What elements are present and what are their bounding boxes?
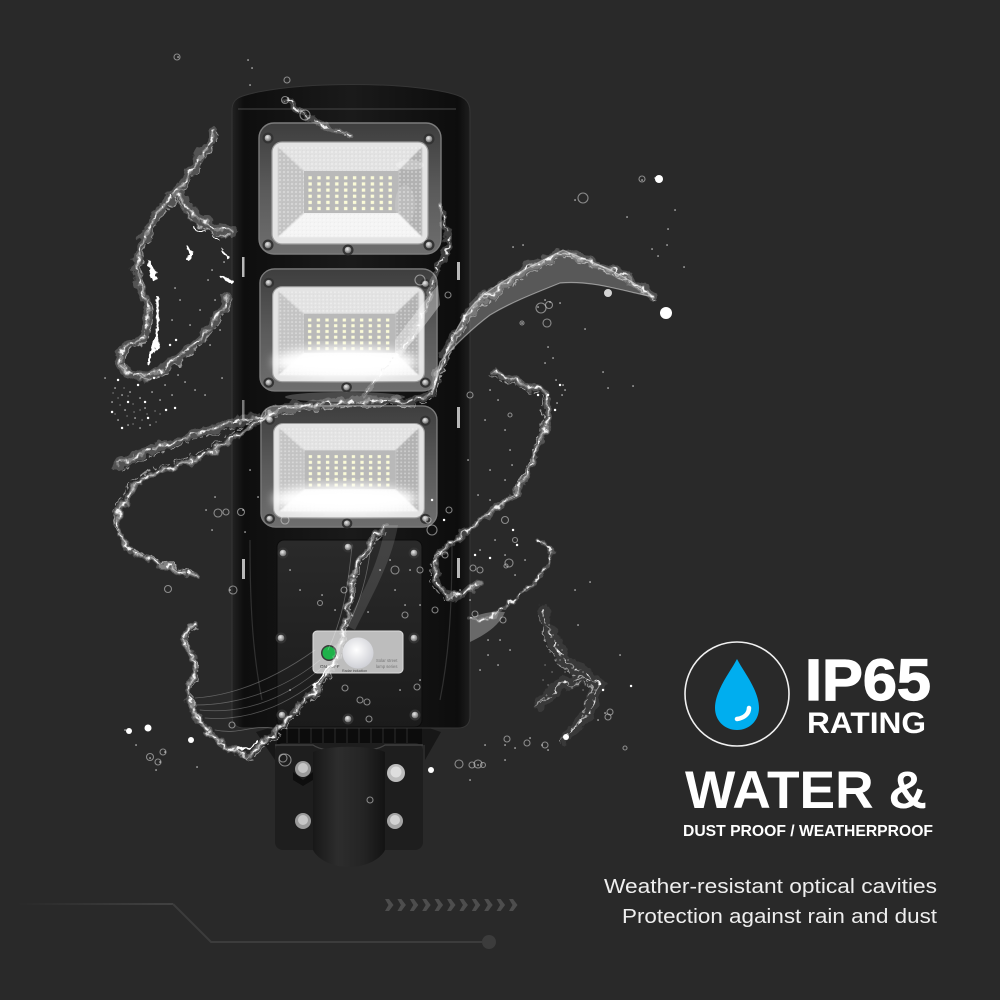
battery plate <box>276 540 422 727</box>
mounting bracket <box>256 726 441 867</box>
LED panel 1 <box>259 123 441 256</box>
sensor module: Radar induction <box>342 669 367 673</box>
icon: ring with water drop <box>685 642 789 746</box>
description text: Protection against rain and dust <box>622 906 937 928</box>
droplet rings <box>146 54 645 803</box>
LED panel 3 <box>261 406 437 528</box>
lamp body <box>232 84 470 728</box>
side slots <box>242 257 460 579</box>
sensor module: Solar street <box>376 658 398 663</box>
sensor module <box>313 631 403 673</box>
chevron row <box>385 899 518 911</box>
main stream blade <box>432 250 653 395</box>
decorative circuit line with node <box>17 904 496 949</box>
thin water sheet strands <box>195 525 505 731</box>
heading: water and: WATER & <box>685 761 927 820</box>
description text <box>604 876 937 928</box>
street lamp <box>232 84 470 867</box>
large drops <box>126 175 672 773</box>
bright highlights <box>147 228 335 752</box>
cluster dots <box>112 258 631 770</box>
subheading: dust proof: DUST PROOF / WEATHERPROOF <box>683 823 933 840</box>
bolts <box>293 761 405 829</box>
water splash <box>105 54 684 803</box>
water dust clouds <box>113 388 595 692</box>
description text: Weather-resistant optical cavities <box>604 876 937 898</box>
sensor module: lamp series <box>376 664 397 669</box>
droplet dots <box>105 57 684 780</box>
heading: rating: RATING <box>807 707 926 740</box>
LED panel 2 <box>260 269 437 392</box>
badge: IP65 rating <box>685 642 931 746</box>
sensor module: ON / OFF <box>320 664 340 669</box>
water over panels <box>285 160 440 402</box>
heading: IP65: IP65 <box>805 648 931 713</box>
stream strands <box>114 100 656 759</box>
